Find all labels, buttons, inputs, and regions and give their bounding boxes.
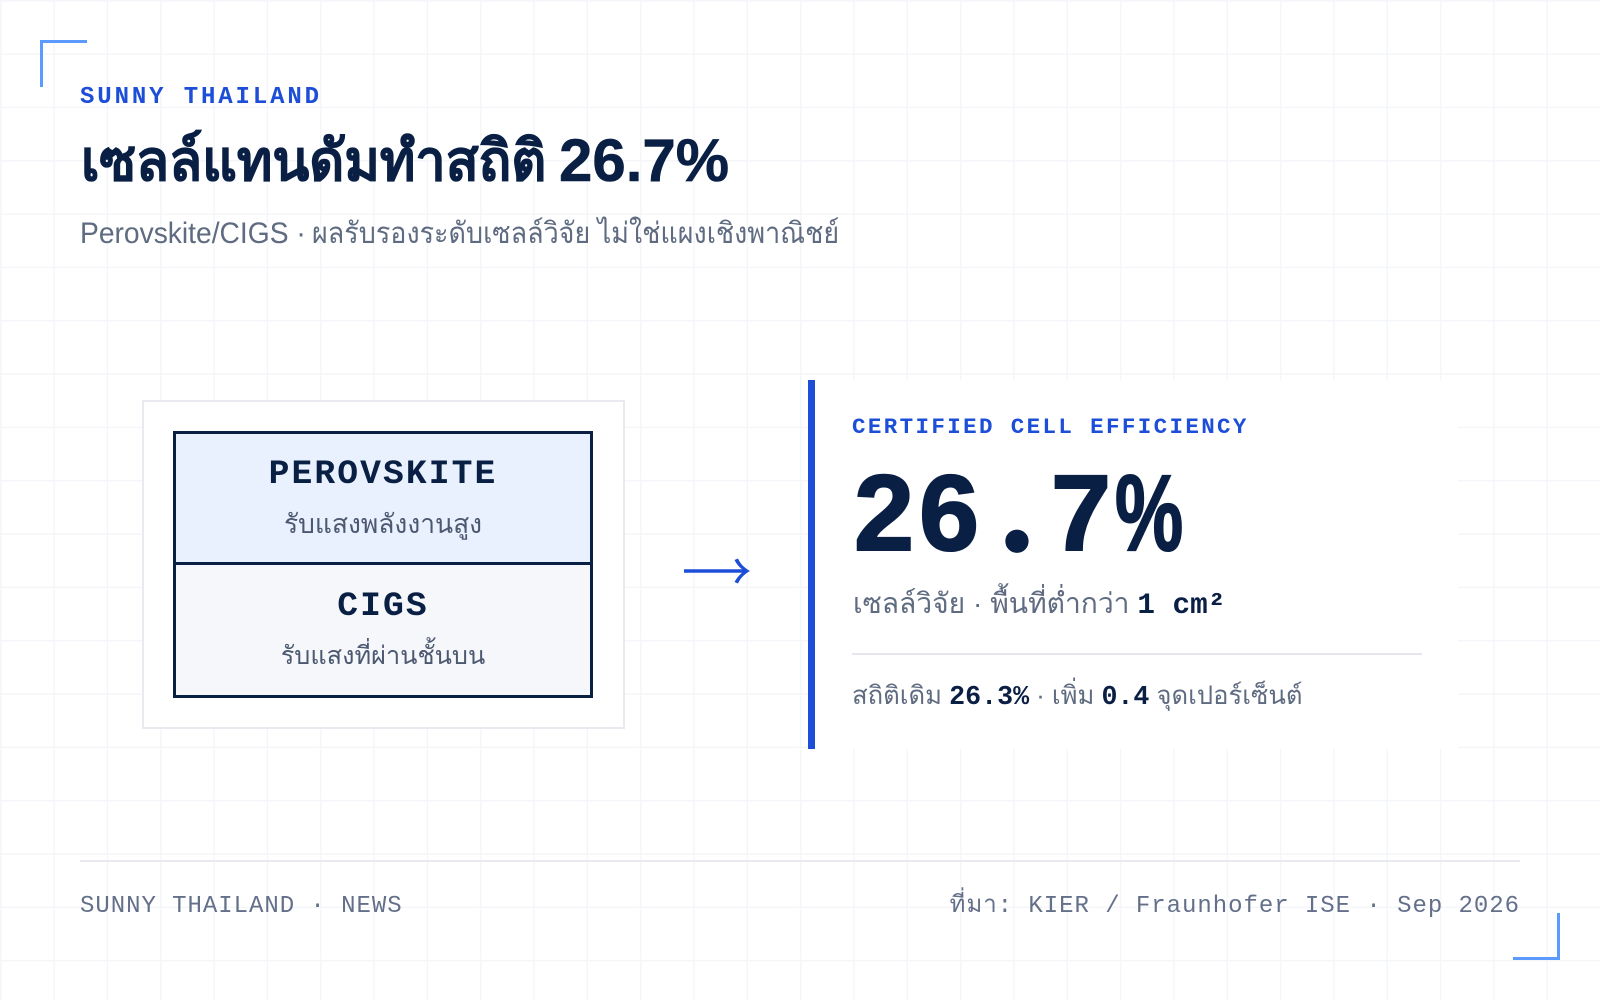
stat label: CERTIFIED CELL EFFICIENCY — [852, 414, 1249, 440]
big number — [854, 434, 1183, 579]
big number: 6 — [919, 452, 979, 573]
subtitle — [80, 216, 839, 250]
layer: perovskite — [176, 434, 590, 565]
corner bracket: bottom right — [1513, 913, 1560, 960]
layer: CIGS — [176, 565, 590, 695]
big number: % — [1115, 452, 1183, 573]
big number: 2 — [854, 452, 914, 573]
title: เซลล์แทนดัมทำสถิติ — [81, 128, 546, 192]
subtitle: ผลรับรองระดับเซลล์วิจัย ไม่ใช่แผงเชิงพาณิชย์ — [312, 217, 839, 250]
panel: efficiency result — [808, 380, 1458, 749]
subtitle: Perovskite/CIGS · — [80, 217, 306, 250]
layer stack — [173, 431, 593, 698]
footer left: SUNNY THAILAND · NEWS — [80, 893, 403, 920]
title: 26.7% — [559, 127, 729, 194]
accent bar — [808, 380, 815, 749]
corner bracket: top left — [40, 40, 87, 87]
footer rule — [80, 860, 1520, 862]
layer: perovskite: รับแสงพลังงานสูง — [284, 509, 482, 539]
layer: perovskite: PEROVSKITE — [269, 455, 497, 494]
divider — [852, 653, 1422, 655]
title — [81, 127, 729, 194]
panel: layer stack diagram — [142, 400, 625, 729]
eyebrow label: SUNNY THAILAND — [80, 84, 322, 111]
footer right: source: ที่มา: KIER / Fraunhofer ISE · Sep 2026 — [950, 893, 1520, 920]
stat description: เซลล์วิจัย · พื้นที่ต่ำกว่า 1 cm² — [853, 587, 1225, 622]
layer: CIGS: รับแสงที่ผ่านชั้นบน — [281, 642, 485, 670]
layer: CIGS: CIGS — [337, 587, 429, 626]
arrow — [684, 558, 750, 584]
big number: . — [1001, 434, 1033, 579]
previous record note: สถิติเดิม 26.3% · เพิ่ม 0.4 จุดเปอร์เซ็นต์ — [852, 682, 1303, 713]
big number: 7 — [1051, 452, 1111, 573]
